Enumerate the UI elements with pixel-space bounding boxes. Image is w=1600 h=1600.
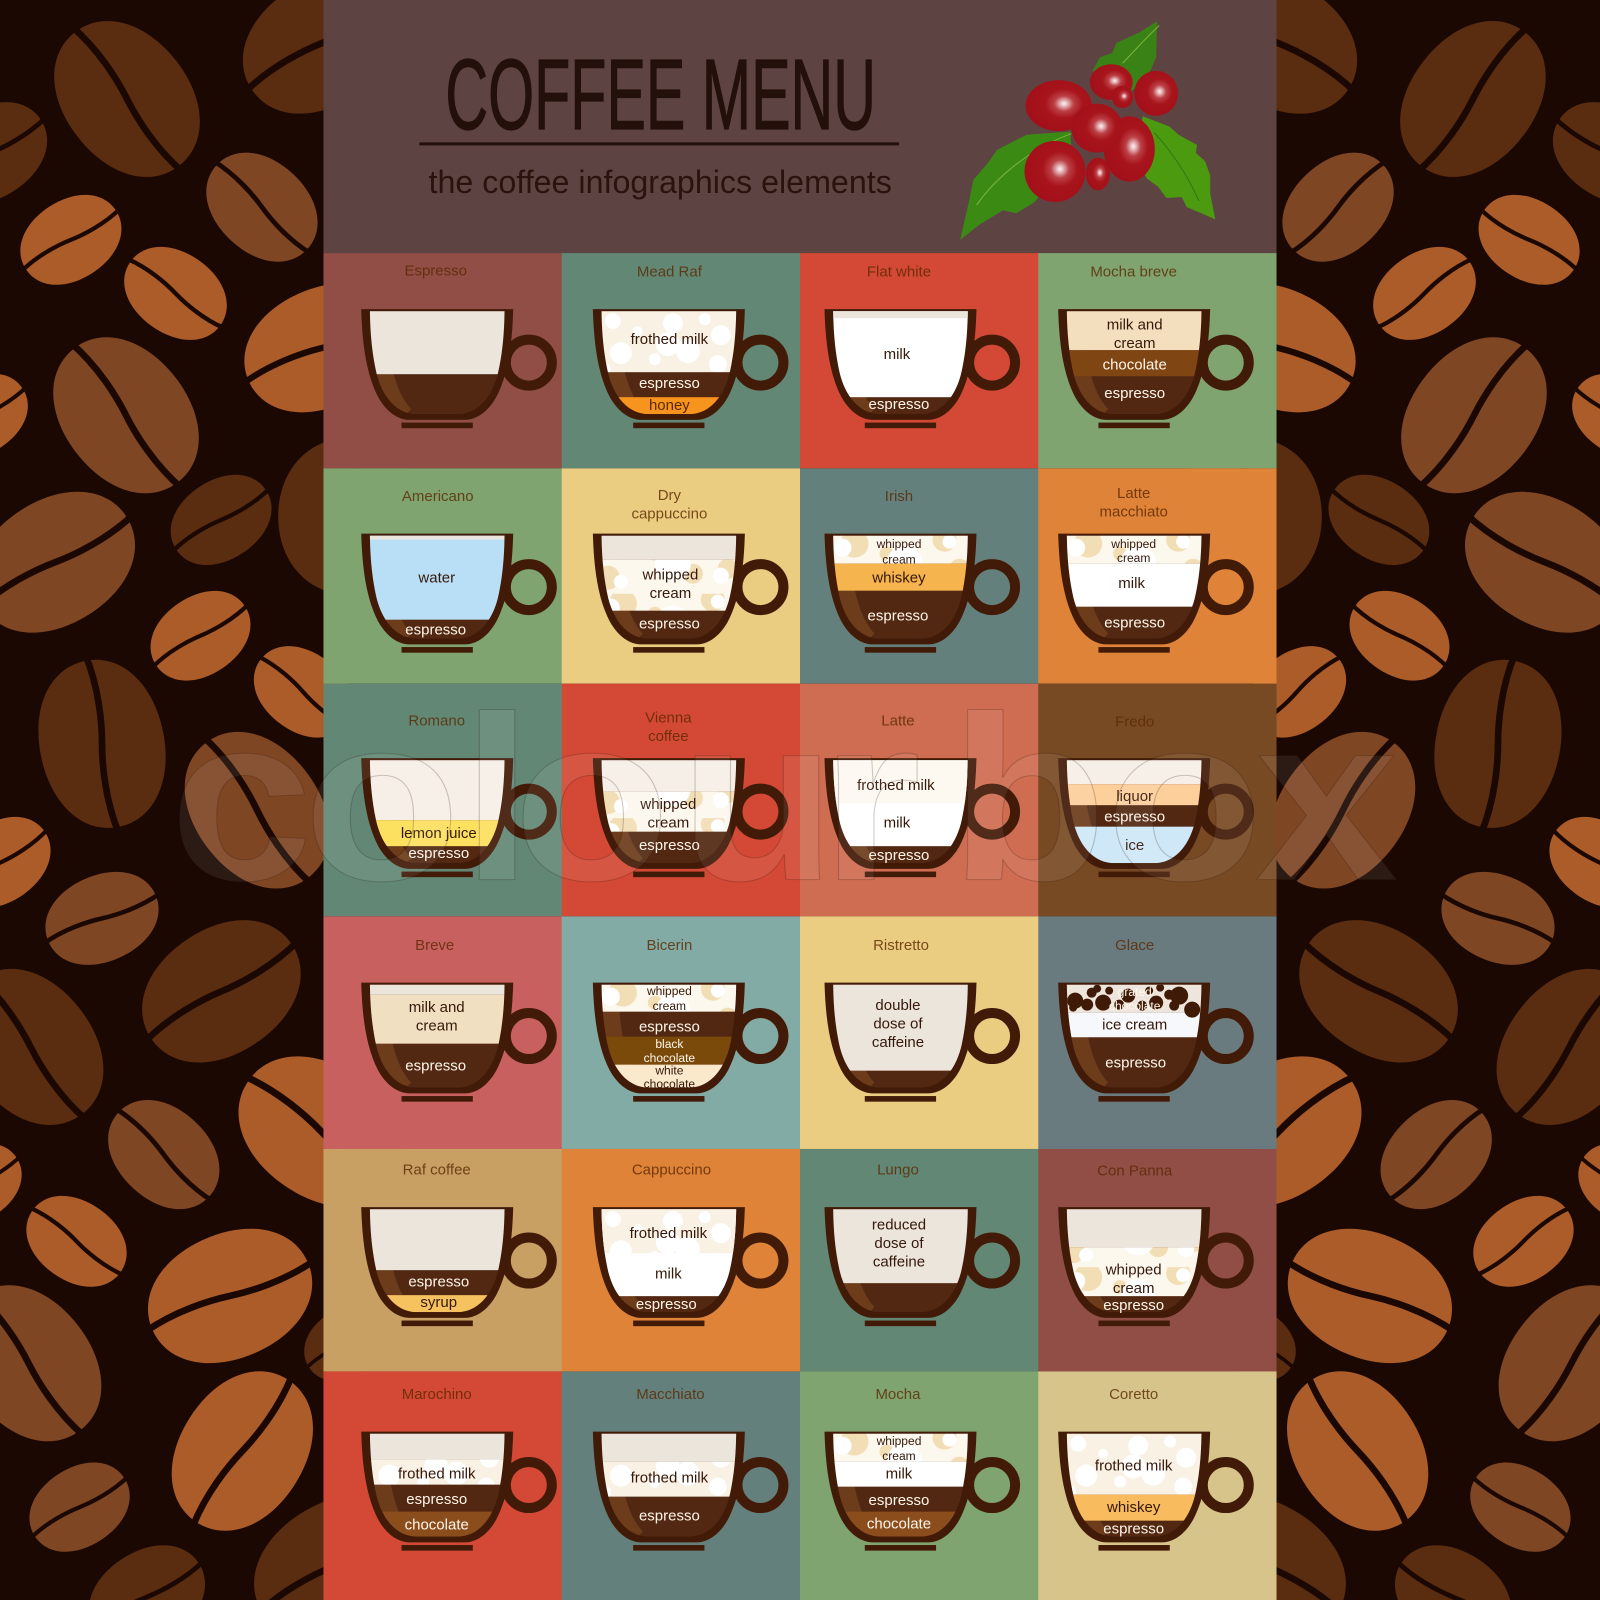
label: whipped cream: cream	[653, 999, 686, 1013]
label: honey: honey	[649, 397, 690, 414]
panel: Glace	[1038, 916, 1277, 1149]
label: espresso: espresso	[1105, 1054, 1166, 1071]
label: milk: milk	[655, 1266, 682, 1283]
label: frothed milk: frothed milk	[631, 331, 709, 348]
heading: cappuccino	[631, 505, 707, 522]
heading: Americano	[402, 488, 474, 505]
label: lemon juice: lemon juice	[401, 825, 477, 842]
label: chocolate: chocolate	[405, 1517, 469, 1534]
label: espresso: espresso	[405, 622, 466, 639]
panel: Lungo	[800, 1149, 1039, 1371]
label: double dose of caffeine: dose of	[873, 1016, 923, 1033]
panel: Cappuccino	[562, 1149, 801, 1371]
label: whipped cream: whipped	[876, 1434, 921, 1448]
heading: Con Panna	[1097, 1163, 1173, 1180]
label: espresso: espresso	[869, 847, 929, 864]
label: frothed milk: frothed milk	[857, 777, 935, 794]
heading: Ristretto	[873, 937, 929, 954]
heading: Romano	[408, 713, 465, 730]
panel: Bicerin	[562, 916, 801, 1149]
label: frothed milk: frothed milk	[630, 1225, 708, 1242]
panel: Ristretto	[800, 916, 1039, 1149]
label: whipped cream: whipped	[639, 796, 696, 813]
heading: Flat white	[867, 264, 931, 281]
icon: coffee berries with leaves	[960, 21, 1215, 240]
label: chocolate: chocolate	[867, 1516, 931, 1533]
label: whipped cream: whipped	[646, 984, 692, 998]
cup	[824, 1207, 1015, 1326]
label: espresso: espresso	[1104, 615, 1165, 632]
heading: Mocha	[875, 1386, 921, 1403]
label: espresso: espresso	[405, 1057, 466, 1074]
heading: Latte	[881, 713, 915, 730]
panel: header	[323, 0, 1277, 253]
cup	[593, 758, 783, 877]
label: reduced dose of caffeine: reduced	[872, 1217, 926, 1234]
title underline	[419, 142, 899, 145]
cup	[593, 309, 783, 428]
heading: Marochino	[402, 1386, 472, 1403]
cup	[1058, 534, 1249, 653]
label: double dose of caffeine: caffeine	[872, 1034, 924, 1051]
cup	[1058, 1207, 1249, 1326]
subtitle: the coffee infographics elements	[429, 163, 892, 200]
right coffee bean pattern	[1155, 0, 1600, 1600]
label: espresso: espresso	[869, 396, 929, 413]
label: milk and cream: milk and	[409, 999, 465, 1016]
cup	[361, 758, 552, 877]
label: whipped cream: cream	[1113, 1280, 1155, 1297]
cup	[1058, 1432, 1249, 1551]
label: reduced dose of caffeine: caffeine	[873, 1253, 925, 1270]
watermark: colourbox	[169, 668, 1398, 930]
label: frothed milk: frothed milk	[1095, 1457, 1173, 1474]
label: white chocolate: white	[654, 1063, 684, 1077]
label: frothed milk: frothed milk	[631, 1470, 709, 1487]
heading: Vienna	[645, 709, 692, 726]
label: whiskey: whiskey	[871, 570, 926, 587]
heading: Latte	[1117, 485, 1150, 502]
label: espresso: espresso	[869, 1492, 929, 1509]
label: liquor: liquor	[1116, 788, 1153, 805]
panel: Mead Raf	[562, 253, 801, 468]
label: whipped cream: cream	[1117, 551, 1150, 565]
panel: Latte macchiato	[1038, 468, 1277, 684]
cup	[593, 983, 783, 1102]
panel: Dry cappuccino	[562, 468, 801, 684]
label: reduced dose of caffeine: dose of	[874, 1235, 924, 1252]
cup	[1058, 758, 1249, 877]
label: espresso: espresso	[639, 375, 700, 392]
cup	[824, 758, 1015, 877]
heading: Fredo	[1115, 714, 1154, 731]
label: milk: milk	[884, 346, 911, 363]
left coffee bean pattern	[0, 0, 445, 1600]
panel: Vienna coffee	[562, 684, 801, 916]
label: milk: milk	[1118, 575, 1145, 592]
cup	[361, 309, 552, 428]
cup	[1058, 309, 1249, 428]
label: black chocolate: chocolate	[644, 1051, 695, 1065]
label: whipped cream: cream	[882, 552, 916, 566]
cup	[361, 1207, 552, 1326]
heading: Lungo	[877, 1161, 919, 1178]
label: white chocolate: chocolate	[644, 1077, 695, 1091]
label: espresso: espresso	[1104, 385, 1165, 402]
label: grated chocolate: grated	[1118, 985, 1152, 999]
label: syrup: syrup	[420, 1294, 457, 1311]
heading: Macchiato	[636, 1386, 705, 1403]
label: ice cream: ice cream	[1102, 1017, 1167, 1034]
label: espresso: espresso	[1103, 1521, 1164, 1538]
label: whipped cream: whipped	[1105, 1261, 1162, 1278]
heading: Raf coffee	[403, 1161, 471, 1178]
cup	[593, 1207, 783, 1326]
label: milk: milk	[886, 1466, 913, 1483]
heading: Dry	[658, 487, 682, 504]
label: milk and cream: cream	[1114, 335, 1156, 352]
panel: Coretto	[1038, 1371, 1277, 1600]
cup	[361, 1432, 552, 1551]
heading: coffee	[648, 728, 689, 745]
label: grated chocolate: chocolate	[1109, 999, 1161, 1013]
panel: Romano	[323, 684, 562, 916]
label: chocolate: chocolate	[1103, 356, 1167, 373]
label: espresso: espresso	[406, 1491, 467, 1508]
label: espresso: espresso	[868, 607, 928, 624]
label: water: water	[417, 570, 455, 587]
title: COFFEE MENU	[445, 39, 876, 151]
label: espresso: espresso	[639, 616, 700, 633]
label: whipped cream: whipped	[641, 567, 698, 584]
panel: Flat white	[800, 253, 1039, 468]
label: espresso: espresso	[639, 1507, 700, 1524]
label: whipped cream: cream	[882, 1449, 916, 1463]
panel: Mocha	[800, 1371, 1039, 1600]
label: espresso: espresso	[1104, 808, 1165, 825]
panel: Fredo	[1038, 684, 1277, 916]
heading: Irish	[885, 488, 913, 505]
cup	[593, 534, 783, 653]
label: milk: milk	[884, 815, 911, 832]
panel: Con Panna	[1038, 1149, 1277, 1371]
heading: Breve	[415, 937, 454, 954]
label: whipped cream: whipped	[876, 537, 921, 551]
label: milk and cream: cream	[416, 1018, 458, 1035]
label: whipped cream: cream	[648, 815, 689, 832]
heading: macchiato	[1099, 503, 1168, 520]
cup	[824, 534, 1015, 653]
heading: Cappuccino	[632, 1161, 711, 1178]
label: espresso: espresso	[408, 845, 469, 862]
panel: Espresso	[323, 253, 562, 468]
label: double dose of caffeine: double	[875, 997, 920, 1014]
label: espresso: espresso	[408, 1274, 469, 1291]
cup	[1058, 983, 1249, 1102]
heading: Glace	[1115, 937, 1154, 954]
cup	[361, 983, 552, 1102]
panel: Irish	[800, 468, 1039, 684]
cup	[593, 1432, 783, 1551]
panel: Mocha breve	[1038, 253, 1277, 468]
label: espresso: espresso	[636, 1296, 697, 1313]
heading: Mocha breve	[1090, 264, 1177, 281]
heading: Bicerin	[646, 937, 692, 954]
label: espresso: espresso	[639, 837, 700, 854]
label: whiskey: whiskey	[1106, 1499, 1161, 1516]
label: whipped cream: whipped	[1110, 537, 1156, 551]
panel: Latte	[800, 684, 1039, 916]
label: frothed milk: frothed milk	[398, 1466, 476, 1483]
cup	[824, 309, 1015, 428]
cup	[361, 534, 552, 653]
label: milk and cream: milk and	[1107, 317, 1163, 334]
panel: Macchiato	[562, 1371, 801, 1600]
panel: Marochino	[323, 1371, 562, 1600]
panel: Breve	[323, 916, 562, 1149]
label: ice: ice	[1125, 837, 1144, 854]
label: black chocolate: black	[655, 1037, 684, 1051]
heading: Coretto	[1109, 1386, 1158, 1403]
panel: Raf coffee	[323, 1149, 562, 1371]
panel: Americano	[323, 468, 562, 684]
cup	[824, 1432, 1015, 1551]
heading: Espresso	[404, 263, 467, 280]
label: espresso: espresso	[639, 1019, 700, 1036]
label: espresso: espresso	[1103, 1297, 1164, 1314]
cup	[824, 983, 1015, 1102]
label: whipped cream: cream	[650, 585, 691, 602]
heading: Mead Raf	[637, 264, 703, 281]
